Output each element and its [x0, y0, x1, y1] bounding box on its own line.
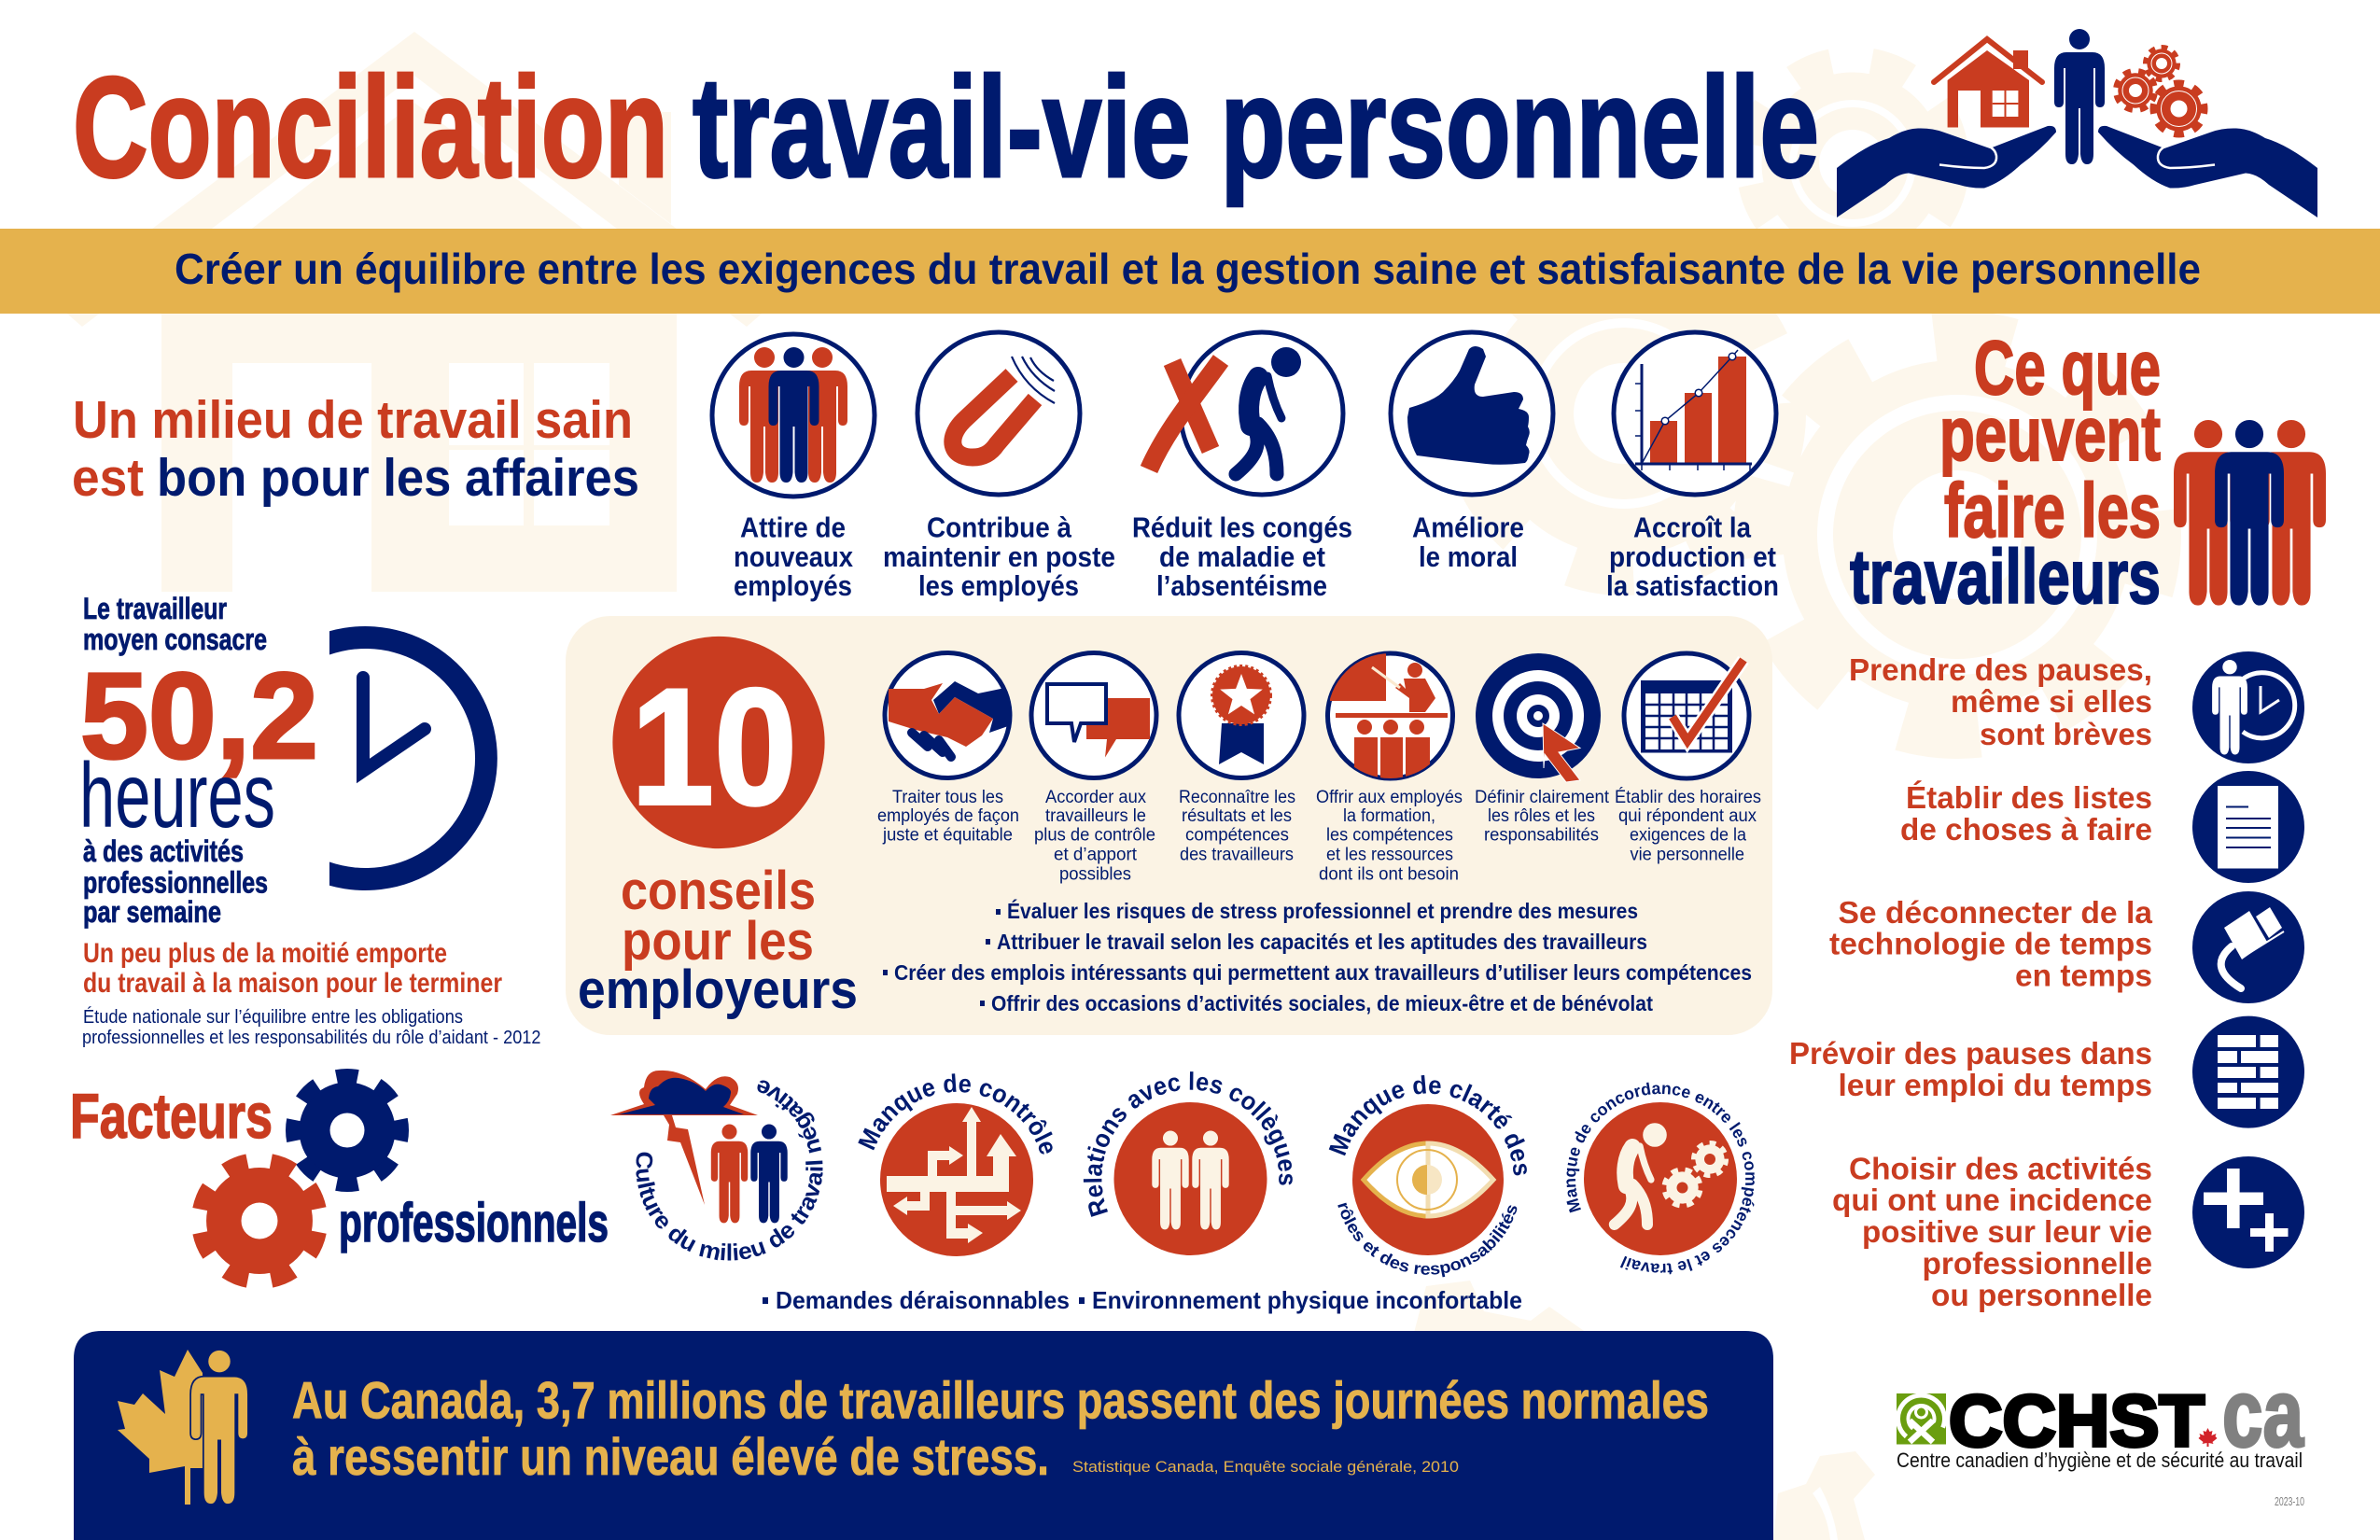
banner text: à ressentir un niveau élevé de stress. [292, 1427, 1049, 1486]
icon: hands holding home, person and gears [1837, 29, 2317, 217]
item: positive activities: qui ont une incidence [1832, 1183, 2152, 1218]
stat: 50,2 hours: heures [79, 744, 275, 847]
heading: tips for employers: employeurs [578, 959, 858, 1020]
bullet list: employer tips: Offrir des occasions d’activités sociales, de mieux-être et de bénévolat [991, 991, 1653, 1015]
stat: 50,2 hours: professionnelles [83, 866, 268, 900]
icon: house [1934, 39, 2042, 127]
factor: skills and job mismatch: Manque de concordance entre les compétences et le travail [1566, 1083, 1755, 1275]
benefit: retain employees: Contribue à [927, 511, 1072, 543]
tip: handshake: Traiter tous les [892, 788, 1003, 807]
stat: 50,2 hours [79, 592, 318, 929]
item: schedule breaks: leur emploi du temps [1839, 1069, 2152, 1103]
icon: left hand [1837, 126, 2056, 217]
factor: lack of control: Manque de contrôle [858, 1073, 1053, 1155]
text: other factors [763, 1286, 1522, 1314]
benefit: morale: le moral [1419, 540, 1518, 573]
item: disconnect: Se déconnecter de la [1839, 896, 2152, 931]
benefit: retain employees: les employés [918, 569, 1079, 602]
benefit: production: la satisfaction [1606, 569, 1779, 602]
badge: 10: 10 [631, 653, 797, 840]
date code: 2023-10 [2275, 1494, 2304, 1508]
heading: healthy workplace [72, 390, 639, 508]
icon: small maple leaf [2199, 1428, 2218, 1447]
tip: training: et les ressources [1326, 846, 1453, 864]
item: disconnect: en temps [2015, 959, 2152, 993]
item: to-do lists: de choses à faire [1900, 813, 2152, 847]
icon: right hand [2098, 126, 2317, 217]
tip: speech bubbles: plus de contrôle [1034, 825, 1155, 846]
benefit: reduce absenteeism: de maladie et [1159, 540, 1325, 573]
subtitle band: Créer un équilibre entre les exigences du travail et la gestion saine et satisfaisante de la vie personnelle [175, 245, 2201, 293]
item: positive activities: Choisir des activités [1849, 1152, 2152, 1187]
bullet list: employer tips: Évaluer les risques de stress professionnel et prendre des mesures [1007, 898, 1638, 923]
benefit: attract employees: nouveaux [734, 540, 854, 573]
tip: speech bubbles: et d’apport [1054, 846, 1138, 864]
icon: clock [329, 626, 497, 890]
text: work brought home: Un peu plus de la moitié emporte [83, 938, 447, 969]
bullet list: employer tips: Créer des emplois intéressants qui permettent aux travailleurs d’utiliser leurs compétences [894, 960, 1752, 985]
benefit: reduce absenteeism [1132, 332, 1352, 602]
benefit: retain employees: maintenir en poste [883, 540, 1115, 573]
item: positive activities [1832, 1152, 2304, 1313]
text: other factors: Demandes déraisonnables [776, 1286, 1070, 1314]
panel: 10 tips for employers [566, 616, 1772, 1035]
factor: relations with colleagues: Relations avec les collègues [1083, 1071, 1293, 1217]
tip: training [1316, 653, 1463, 885]
benefit: attract employees: employés [734, 569, 852, 602]
heading: tips for employers: conseils [621, 861, 816, 921]
benefit: attract employees [712, 334, 875, 602]
banner text [292, 1370, 1709, 1486]
tip: speech bubbles: travailleurs le [1045, 806, 1146, 826]
item: breaks: Prendre des pauses, [1849, 653, 2152, 688]
heading: what workers can do: peuvent [1939, 392, 2161, 477]
text: work brought home: du travail à la maison pour le terminer [83, 968, 502, 999]
benefit: production [1606, 332, 1779, 602]
tip: award ribbon: compétences [1185, 825, 1289, 846]
tip: speech bubbles: Accorder aux [1045, 788, 1146, 807]
banner: 3.7 million workers [74, 1331, 1773, 1540]
heading: healthy workplace: est [72, 448, 144, 508]
tip: calendar: exigences de la [1630, 825, 1746, 846]
item: to-do lists [1900, 771, 2304, 883]
heading: healthy workplace: bon pour les affaires [157, 448, 639, 508]
title [73, 48, 1819, 207]
source note [82, 1006, 541, 1048]
tip: award ribbon: Reconnaître les [1179, 788, 1295, 807]
logo: CCHST.ca [1888, 1359, 2304, 1472]
tip: handshake: employés de façon [877, 806, 1019, 826]
heading: tips for employers: pour les [622, 911, 814, 972]
logo: CCHST.ca: ca [2222, 1359, 2304, 1467]
text: other factors: Environnement physique inconfortable [1092, 1286, 1522, 1314]
tip: speech bubbles [1031, 653, 1156, 885]
tip: target: Définir clairement [1475, 788, 1610, 807]
tip: award ribbon: des travailleurs [1180, 846, 1294, 864]
icon: person [2054, 29, 2105, 164]
factor: negative workplace culture: Culture du milieu de travail négative [636, 1081, 823, 1260]
benefit: production: Accroît la [1633, 511, 1752, 543]
tip: award ribbon: résultats et les [1182, 806, 1292, 826]
banner text: Au Canada, 3,7 millions de travailleurs passent des journées normales [292, 1370, 1709, 1430]
item: breaks [1849, 651, 2304, 763]
source note: Étude nationale sur l’équilibre entre les obligations [83, 1006, 463, 1028]
stat: 50,2 hours: moyen consacre [83, 623, 267, 656]
icon: navy gear [293, 1076, 401, 1184]
icon: gears [2110, 45, 2205, 134]
tip: training: Offrir aux employés [1316, 788, 1463, 807]
subtitle band [0, 229, 2380, 314]
item: disconnect: technologie de temps [1829, 928, 2152, 961]
source note: Statistique Canada, Enquête sociale générale, 2010 [1072, 1458, 1459, 1476]
item: positive activities: ou personnelle [1931, 1279, 2152, 1313]
benefit: reduce absenteeism: Réduit les congés [1132, 511, 1352, 543]
text: work brought home [82, 938, 541, 1048]
tip: award ribbon [1179, 653, 1304, 864]
item: schedule breaks [1789, 1016, 2304, 1128]
factor: role clarity: Manque de clarté des [1329, 1075, 1527, 1176]
factor: lack of control [858, 1073, 1053, 1256]
item: positive activities: professionnelle [1923, 1247, 2152, 1281]
icon: CCHST emblem [1888, 1386, 1954, 1451]
benefit: reduce absenteeism: l’absentéisme [1156, 569, 1327, 602]
stat: 50,2 hours: 50,2 [80, 647, 318, 784]
title: Conciliation [73, 48, 668, 207]
list: what workers can do [1789, 651, 2304, 1313]
heading: work factors: professionnels [339, 1193, 609, 1253]
tip: calendar [1615, 653, 1761, 864]
bullet list: employer tips [883, 898, 1752, 1015]
heading: tips for employers [578, 861, 858, 1020]
item: breaks: même si elles [1951, 685, 2152, 720]
item: disconnect [1829, 891, 2304, 1003]
tip: handshake [877, 653, 1019, 846]
stat: 50,2 hours: Le travailleur [83, 592, 227, 625]
tip: speech bubbles: possibles [1059, 864, 1131, 885]
source note: professionnelles et les responsabilités du rôle d’aidant - 2012 [82, 1028, 541, 1048]
tip: handshake: juste et équitable [882, 825, 1013, 846]
benefit: morale: Améliore [1412, 511, 1524, 543]
icon: red gear [181, 1142, 338, 1299]
tip: training: les compétences [1326, 825, 1453, 846]
tip: calendar: vie personnelle [1630, 846, 1744, 864]
icon: maple leaf and person [118, 1350, 248, 1505]
stat: 50,2 hours: par semaine [83, 895, 221, 929]
tip: target: responsabilités [1484, 825, 1599, 846]
benefit: production: production et [1609, 540, 1776, 573]
heading: healthy workplace: Un milieu de travail sain [73, 390, 633, 450]
tip: calendar: qui répondent aux [1618, 806, 1757, 826]
title: travail-vie personnelle [693, 48, 1819, 207]
item: breaks: sont brèves [1980, 718, 2152, 752]
benefit: retain employees [883, 332, 1115, 602]
tip: training: la formation, [1343, 806, 1435, 826]
heading: what workers can do: travailleurs [1850, 535, 2161, 620]
tip: training: dont ils ont besoin [1319, 864, 1459, 885]
item: to-do lists: Établir des listes [1906, 780, 2152, 816]
heading: what workers can do [1850, 326, 2161, 620]
tip: target: les rôles et les [1488, 806, 1595, 826]
logo: CCHST.ca: CCHST [1949, 1379, 2205, 1462]
factor: role clarity [1329, 1075, 1527, 1277]
heading: work factors: Facteurs [70, 1081, 273, 1152]
stat: 50,2 hours: à des activités [83, 834, 244, 868]
factor: role clarity: rôles et des responsabilités [1337, 1202, 1518, 1277]
tip: calendar: Établir des horaires [1615, 788, 1761, 807]
heading: what workers can do: Ce que [1974, 326, 2161, 411]
benefit: attract employees: Attire de [740, 511, 846, 543]
logo: CCHST.ca: Centre canadien d’hygiène et de sécurité au travail [1897, 1449, 2303, 1472]
heading: what workers can do: faire les [1944, 469, 2161, 553]
icon: three workers [2174, 420, 2326, 606]
bullet list: employer tips: Attribuer le travail selon les capacités et les aptitudes des travailleurs [997, 930, 1647, 954]
tip: target [1475, 653, 1610, 846]
benefit: morale [1391, 332, 1553, 573]
item: positive activities: positive sur leur vie [1862, 1215, 2152, 1250]
item: schedule breaks: Prévoir des pauses dans [1789, 1037, 2152, 1071]
heading: work factors [70, 1076, 609, 1299]
